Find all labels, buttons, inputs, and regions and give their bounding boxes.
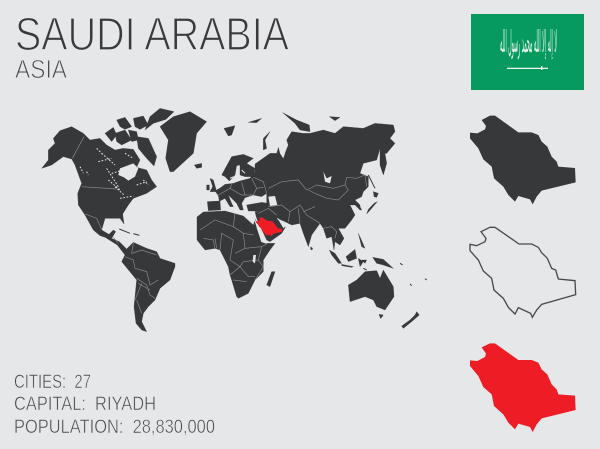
Europe xyxy=(207,154,290,211)
stats: capital: CAPITAL: RIYADH xyxy=(14,394,156,415)
New Zealand xyxy=(402,312,419,328)
Africa xyxy=(197,211,275,298)
borders xyxy=(253,175,367,238)
Saudi Arabia silhouette, dark xyxy=(470,116,576,204)
world map xyxy=(42,108,427,332)
Saudi Arabia outline xyxy=(470,227,576,317)
flag of Saudi Arabia xyxy=(471,14,584,90)
North America xyxy=(42,108,207,239)
title: SAUDI ARABIA xyxy=(15,8,289,60)
seas and lakes xyxy=(268,172,332,206)
Saudi Arabia highlighted on map xyxy=(256,217,282,237)
Eurasia, Africa, Oceania xyxy=(197,113,427,328)
Indonesia, Philippines, New Guinea xyxy=(329,233,393,268)
Canadian lakes and inlets xyxy=(80,148,148,198)
Arabian gulf edge xyxy=(255,218,287,243)
subtitle: continent: ASIA xyxy=(15,54,68,84)
South America xyxy=(102,230,175,332)
Sri Lanka xyxy=(311,247,313,250)
Australia xyxy=(348,270,394,310)
Madagascar xyxy=(267,272,275,287)
Saudi Arabia silhouette, red xyxy=(470,343,576,432)
stats: population: POPULATION: 28,830,000 xyxy=(14,417,215,438)
Hudson Bay xyxy=(118,163,138,181)
stats: cities: CITIES: 27 xyxy=(14,372,91,393)
